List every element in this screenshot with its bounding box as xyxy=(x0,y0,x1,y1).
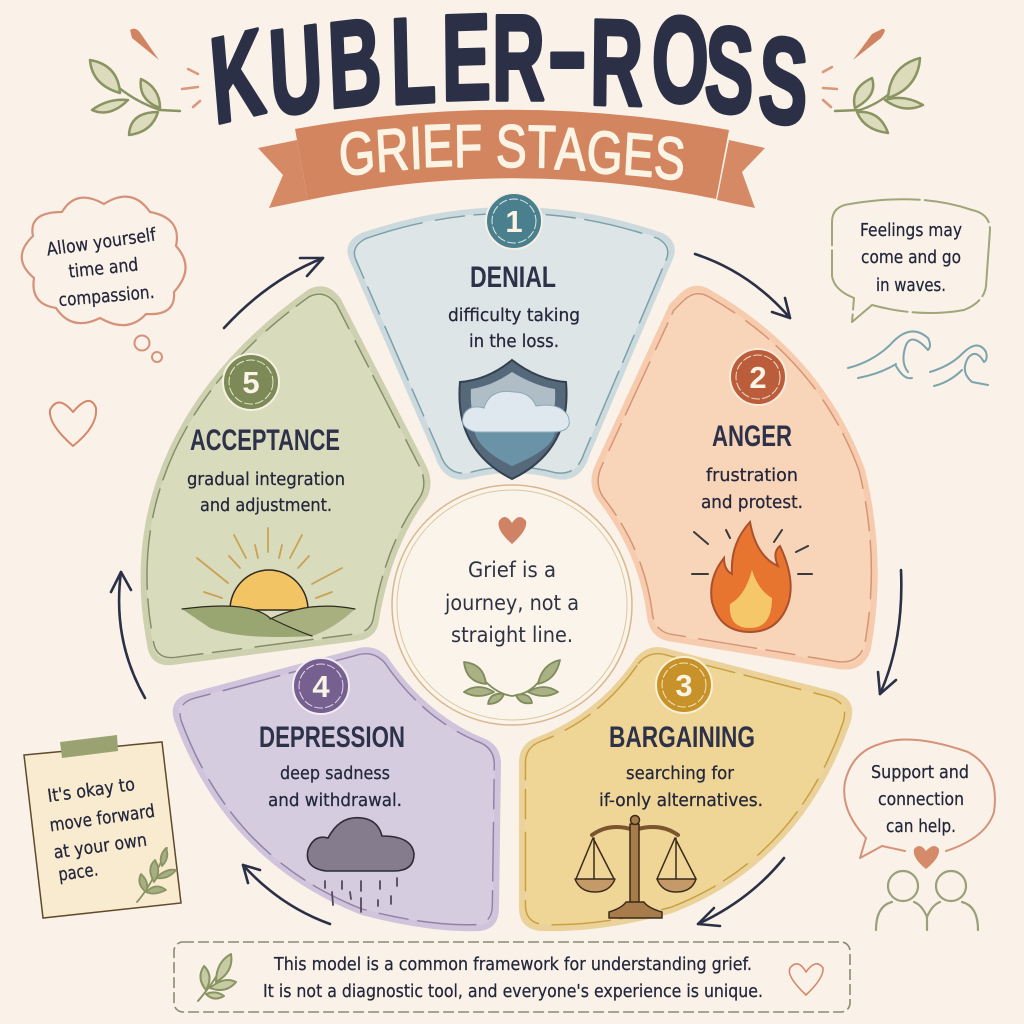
callout: support speech bubble: connection xyxy=(878,789,964,810)
text: acceptance description: and adjustment. xyxy=(200,495,332,516)
stage number 2 xyxy=(730,349,786,405)
footer note: This model is a common framework for understanding grief. xyxy=(273,954,752,975)
text: anger description: frustration xyxy=(706,465,798,486)
text: bargaining description: if-only alternatives. xyxy=(599,790,763,811)
icon: waves xyxy=(848,331,988,386)
callout: support speech bubble xyxy=(844,740,995,858)
stage number 2: 2 xyxy=(749,360,767,395)
decoration: right sprig xyxy=(835,58,923,133)
text: depression description xyxy=(268,763,402,811)
text: depression description: and withdrawal. xyxy=(268,790,402,811)
heading: denial: DENIAL xyxy=(470,261,556,294)
icon: heart xyxy=(499,517,526,544)
heading: bargaining: BARGAINING xyxy=(609,721,755,754)
panel: acceptance xyxy=(144,289,428,662)
stage number 5: 5 xyxy=(242,365,260,400)
callout: sticky note: at your own xyxy=(52,830,148,863)
heading: anger: ANGER xyxy=(712,420,792,453)
arrow: bargaining to depression xyxy=(698,858,784,926)
stage number 1 xyxy=(486,193,542,249)
decoration: accent marks xyxy=(130,29,885,107)
heading: depression: DEPRESSION xyxy=(259,721,405,754)
panel: denial xyxy=(350,193,672,479)
stage number 5 xyxy=(223,354,279,410)
banner: grief stages: GRIEF STAGES xyxy=(337,113,687,194)
arrow: depression lower curve xyxy=(243,865,330,924)
center circle xyxy=(392,485,632,725)
stage number 4 xyxy=(293,658,349,714)
callout: sticky note: It's okay to xyxy=(46,774,136,807)
icon: flame xyxy=(692,522,812,632)
icon: shield with cloud xyxy=(459,360,569,479)
callout: sticky note: move forward xyxy=(48,801,156,836)
callout: sticky note: pace. xyxy=(57,859,100,886)
stage number 3 xyxy=(656,657,712,713)
arrow: anger to bargaining xyxy=(878,570,901,694)
banner: grief stages xyxy=(258,110,765,208)
icon: heart and people xyxy=(876,846,978,930)
panel: anger xyxy=(594,289,875,667)
arrow: acceptance to denial xyxy=(224,258,323,328)
callout: thought cloud: time and xyxy=(68,254,139,283)
footer note xyxy=(174,942,850,1012)
text: denial description xyxy=(448,305,580,352)
arrow: depression to acceptance xyxy=(111,572,145,698)
text: anger description: and protest. xyxy=(701,492,803,513)
text: center message: Grief is a xyxy=(468,558,556,582)
text: bargaining description xyxy=(599,763,763,811)
icon: footer heart xyxy=(789,964,823,995)
text: denial description: difficulty taking xyxy=(448,305,580,326)
icon: laurel xyxy=(464,660,560,704)
callout: sticky note xyxy=(24,735,181,918)
text: denial description: in the loss. xyxy=(469,331,559,352)
text: center message: journey, not a xyxy=(444,591,579,615)
footer note: It is not a diagnostic tool, and everyone's experience is unique. xyxy=(263,981,763,1002)
icon: scales xyxy=(575,816,696,918)
panel: bargaining xyxy=(522,650,849,928)
stage number 3: 3 xyxy=(675,668,693,703)
callout: feelings speech bubble: come and go xyxy=(861,247,961,268)
callout: support speech bubble: can help. xyxy=(886,816,956,837)
callout: support speech bubble: Support and xyxy=(871,762,969,783)
panel: depression xyxy=(176,650,498,928)
callout: feelings speech bubble: Feelings may xyxy=(860,220,962,241)
text: acceptance description: gradual integration xyxy=(187,469,345,490)
callout: thought cloud: Allow yourself xyxy=(45,224,158,261)
icon: heart outline left xyxy=(50,401,96,446)
heading: acceptance: ACCEPTANCE xyxy=(190,424,340,457)
text: anger description xyxy=(701,465,803,513)
callout: feelings speech bubble: in waves. xyxy=(876,275,946,296)
decoration: left sprig xyxy=(90,60,180,135)
text: acceptance description xyxy=(187,469,345,516)
text: center message: straight line. xyxy=(451,623,573,647)
callout: feelings speech bubble xyxy=(832,199,990,322)
text: center message xyxy=(444,558,579,647)
icon: footer sprig xyxy=(198,954,236,1001)
title xyxy=(206,0,810,152)
callout: thought cloud: compassion. xyxy=(58,282,155,311)
icon: sunrise xyxy=(182,528,355,637)
arrow: denial to anger xyxy=(695,254,790,318)
stage number 4: 4 xyxy=(312,669,330,704)
icon: rain cloud xyxy=(307,818,414,912)
text: depression description: deep sadness xyxy=(280,763,390,784)
text: bargaining description: searching for xyxy=(626,763,735,784)
callout: thought cloud xyxy=(22,197,186,362)
stage number 1: 1 xyxy=(505,204,523,239)
